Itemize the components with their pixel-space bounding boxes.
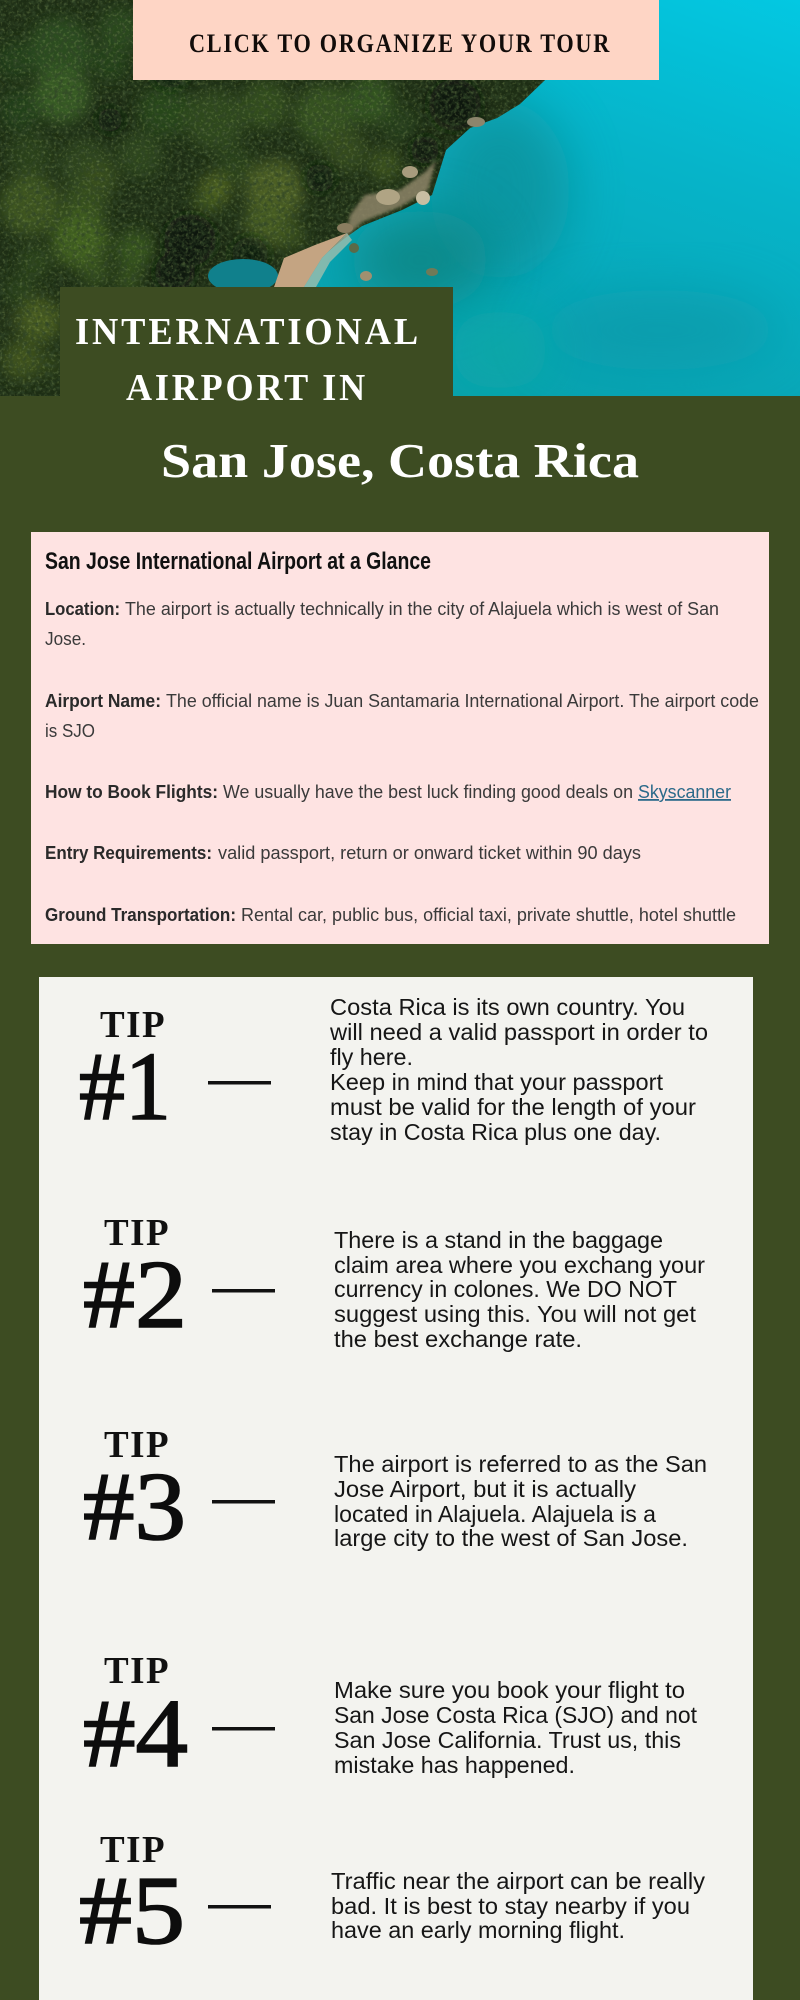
- how to book flights: [45, 782, 731, 802]
- tip 4: San Jose California. Trust us, this: [334, 1727, 681, 1753]
- airport name: The official name is Juan Santamaria International Airport. The airport code: [166, 691, 759, 711]
- tip 3: #3: [83, 1453, 186, 1560]
- tip 5: Traffic near the airport can be really: [331, 1868, 706, 1894]
- tip 3: Jose Airport, but it is actually: [334, 1476, 637, 1502]
- tip 1: [79, 994, 708, 1145]
- tip 4: #4: [83, 1680, 188, 1787]
- tip 1: Keep in mind that your passport: [330, 1069, 664, 1095]
- tip 3: [83, 1424, 707, 1560]
- button: click to organize your tour: CLICK TO ORGANIZE YOUR TOUR: [189, 29, 611, 58]
- button: click to organize your tour: [133, 0, 659, 80]
- tip 4: TIP: [104, 1650, 170, 1692]
- tip 3: The airport is referred to as the San: [334, 1451, 707, 1477]
- how to book flights: How to Book Flights:: [45, 782, 218, 802]
- tip 1: fly here.: [330, 1044, 413, 1070]
- how to book flights: We usually have the best luck finding good deals on: [223, 782, 633, 802]
- title block: INTERNATIONAL: [75, 311, 421, 353]
- tip 4: San Jose Costa Rica (SJO) and not: [334, 1702, 698, 1728]
- tip 4: Make sure you book your flight to: [334, 1677, 685, 1703]
- tip 3: large city to the west of San Jose.: [334, 1525, 688, 1551]
- tip 1: Costa Rica is its own country. You: [330, 994, 685, 1020]
- tip 1: #1: [79, 1033, 171, 1140]
- tip 2: [83, 1212, 705, 1352]
- entry requirements: Entry Requirements:: [45, 843, 212, 863]
- forest: [0, 0, 560, 396]
- panel heading: San Jose International Airport at a Glance: [45, 548, 431, 575]
- tip 5: #5: [79, 1857, 185, 1964]
- tip 2: TIP: [104, 1212, 170, 1254]
- title block: San Jose, Costa Rica: [161, 433, 639, 488]
- location: Location:: [45, 599, 120, 619]
- tip 1: TIP: [100, 1004, 166, 1046]
- tip 4: [83, 1650, 698, 1787]
- tip 1: will need a valid passport in order to: [329, 1019, 708, 1045]
- tip 2: the best exchange rate.: [334, 1326, 582, 1352]
- rocky shoreline: [337, 117, 485, 238]
- tip 5: [79, 1829, 706, 1964]
- tip 2: currency in colones. We DO NOT: [334, 1276, 677, 1302]
- title block: [60, 287, 639, 488]
- entry requirements: valid passport, return or onward ticket within 90 days: [218, 843, 641, 863]
- tip 4: mistake has happened.: [334, 1752, 575, 1778]
- tip 5: bad. It is best to stay nearby if you: [331, 1893, 690, 1919]
- airport name: is SJO: [45, 721, 95, 741]
- tip 3: located in Alajuela. Alajuela is a: [334, 1501, 656, 1527]
- hero photo: forest coast and turquoise sea: [0, 0, 800, 396]
- tip 2: claim area where you exchang your: [334, 1252, 705, 1278]
- tip 3: TIP: [104, 1424, 170, 1466]
- airport name: [45, 691, 759, 741]
- tip 1: stay in Costa Rica plus one day.: [330, 1119, 661, 1145]
- tip 5: TIP: [100, 1829, 166, 1871]
- how to book flights: Skyscanner: [638, 782, 731, 802]
- tip 2: suggest using this. You will not get: [334, 1301, 697, 1327]
- tip 5: have an early morning flight.: [331, 1917, 625, 1943]
- panel: airport at a glance: [31, 532, 769, 944]
- location: The airport is actually technically in the city of Alajuela which is west of San: [125, 599, 719, 619]
- sea: [304, 0, 800, 396]
- location: Jose.: [45, 629, 86, 649]
- title block: AIRPORT IN: [126, 367, 368, 409]
- cove and beach: [208, 233, 352, 293]
- panel: tips: [39, 977, 753, 2000]
- tip 1: must be valid for the length of your: [330, 1094, 696, 1120]
- airport name: Airport Name:: [45, 691, 161, 711]
- ground transportation: Rental car, public bus, official taxi, private shuttle, hotel shuttle: [241, 905, 736, 925]
- ground transportation: Ground Transportation:: [45, 905, 236, 925]
- tip 2: There is a stand in the baggage: [334, 1227, 663, 1253]
- tip 2: #2: [83, 1241, 187, 1348]
- location: [45, 599, 719, 649]
